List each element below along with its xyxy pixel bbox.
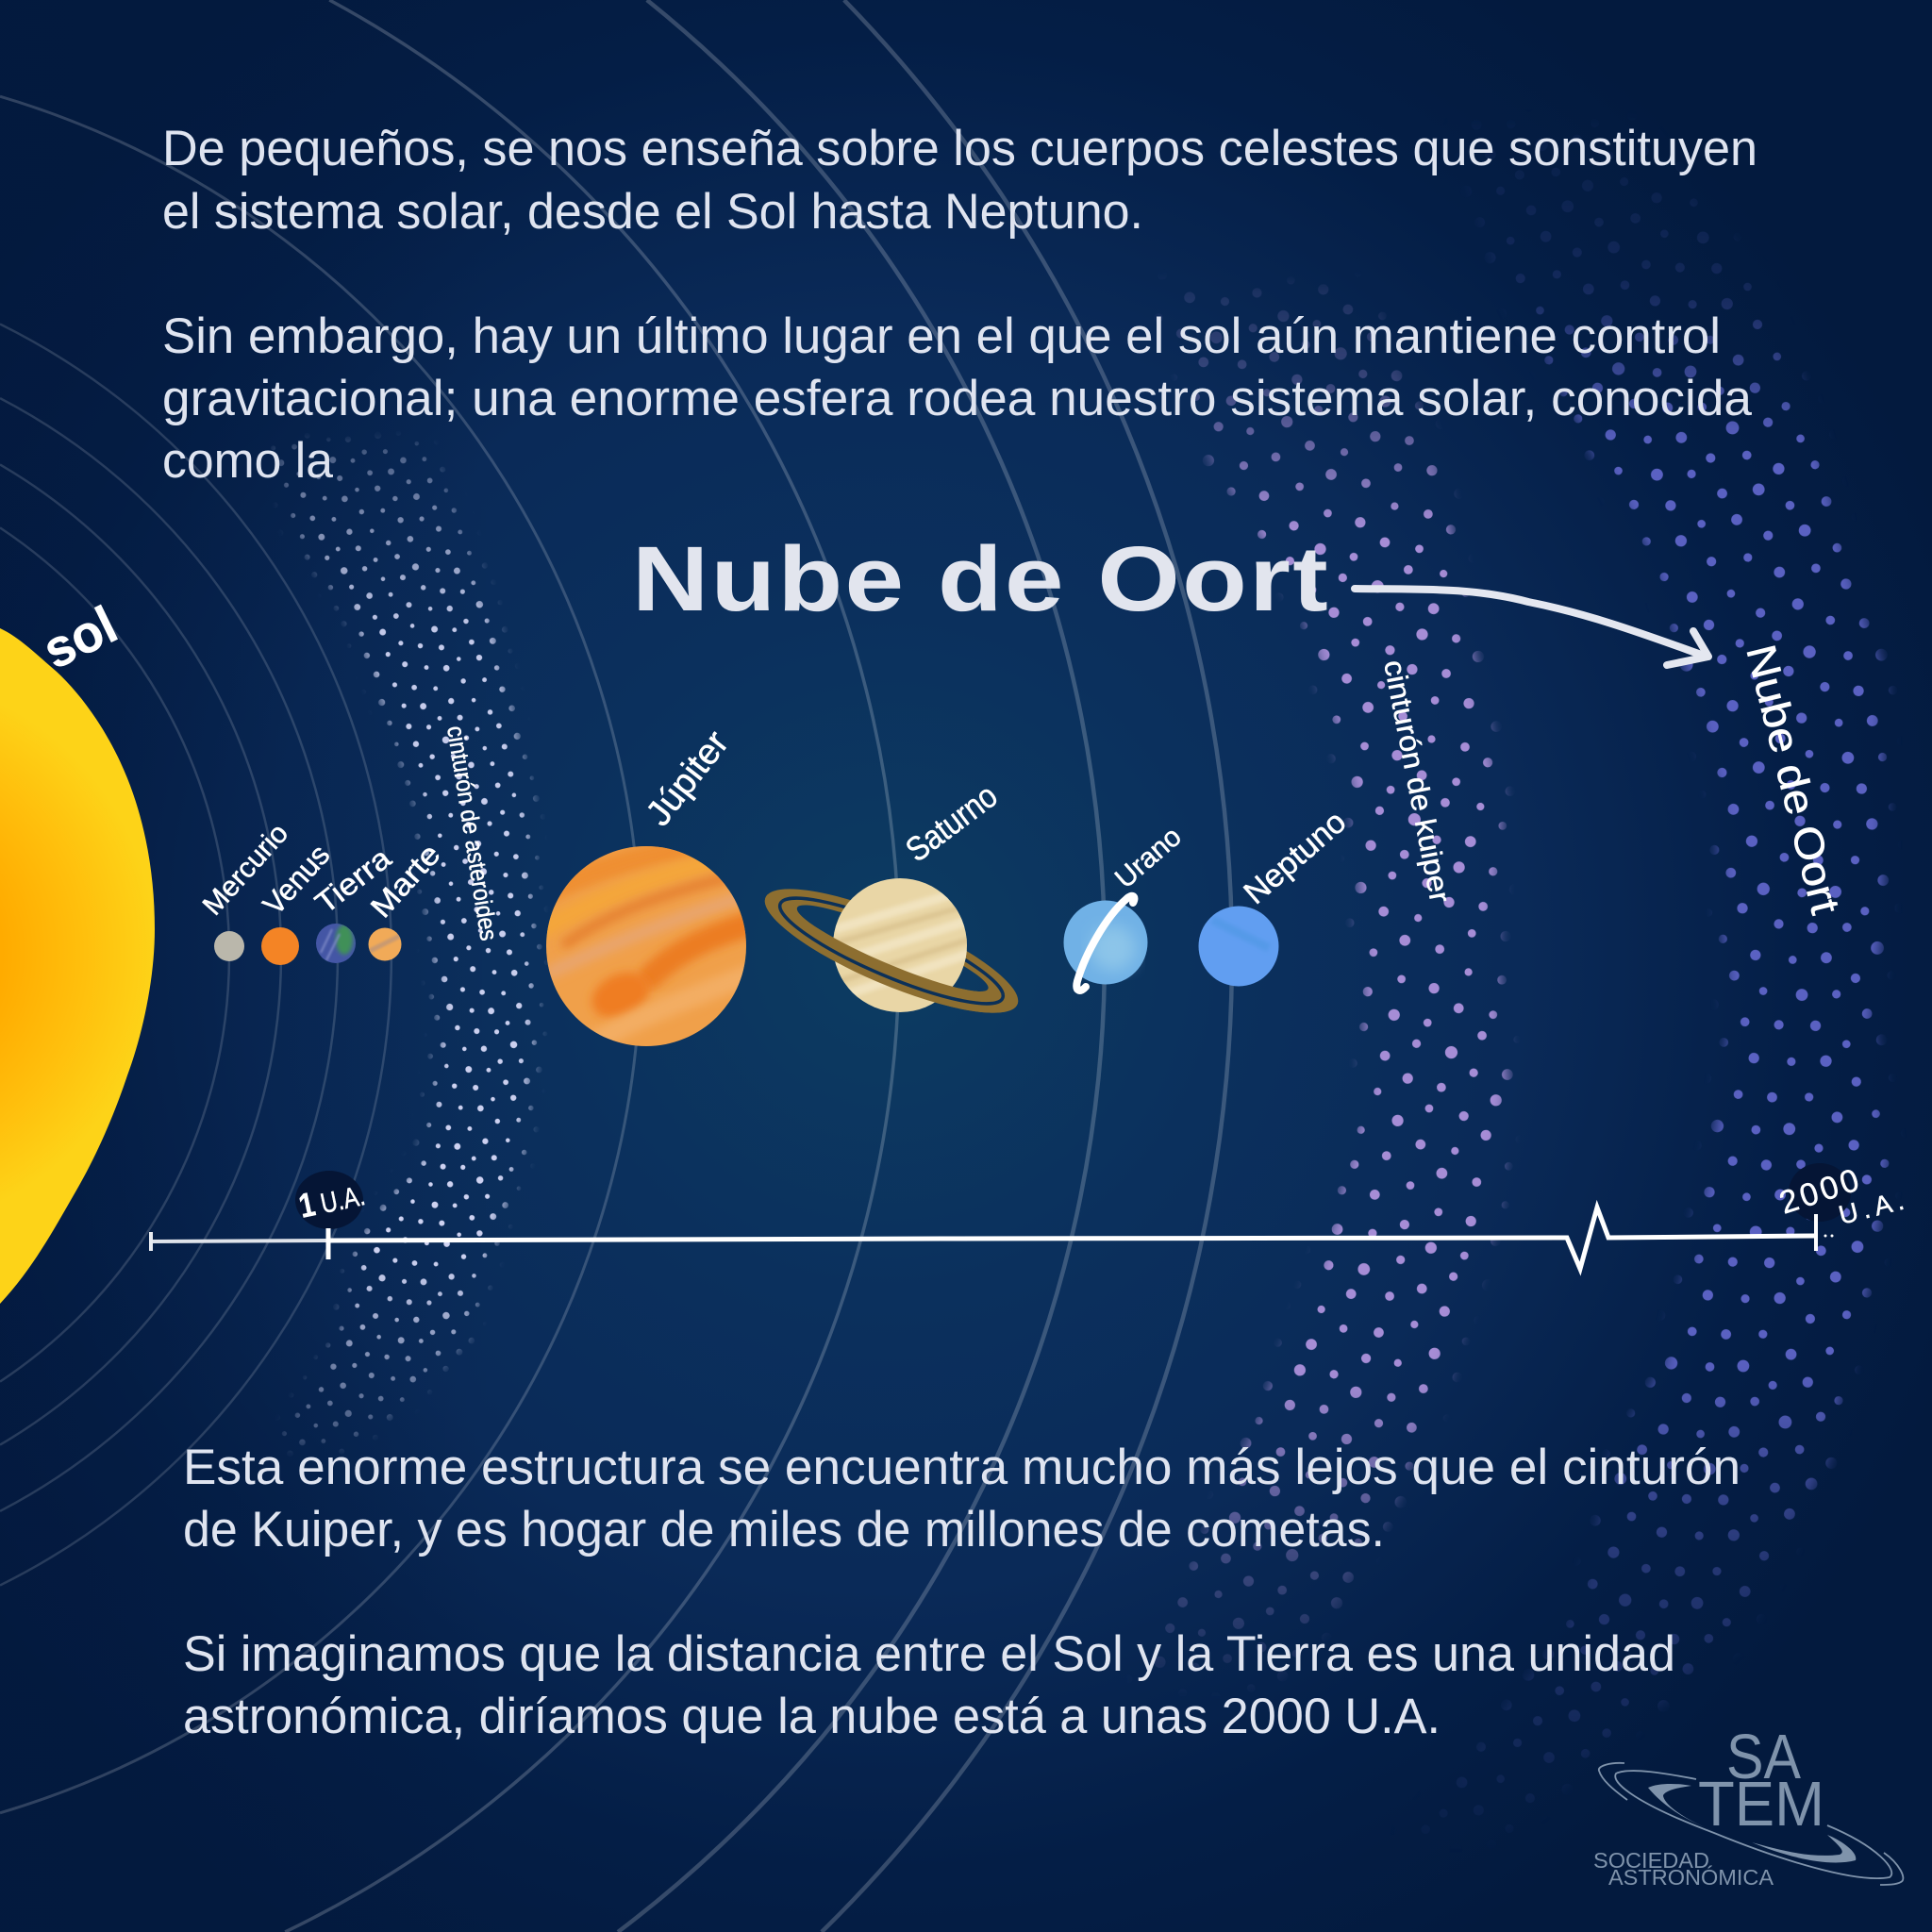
orbits [0, 0, 1232, 1932]
label: Marte: Marte [363, 837, 447, 924]
label: 2000: 2000 [1775, 1162, 1863, 1222]
label: cinturón de asteroides: cinturón de asteroides [441, 724, 504, 942]
kuiper belt dots [1155, 281, 1516, 1678]
planet: Saturno [764, 789, 1019, 1013]
planet: Júpiter [546, 731, 746, 1046]
label: U.A.: U.A. [1836, 1186, 1907, 1230]
planet: Neptuno [1198, 815, 1345, 987]
label: 1 U.A.: 1 U.A. [295, 1174, 368, 1225]
closing text: Si imaginamos que la distancia entre el Sol y la Tierra es una unidad [183, 1626, 1675, 1682]
intro text [162, 121, 1757, 489]
label: sol: sol [34, 594, 125, 680]
label: Urano: Urano [1109, 821, 1188, 894]
closing text: de Kuiper, y es hogar de miles de millones de cometas. [183, 1502, 1385, 1557]
label: Mercurio: Mercurio [197, 818, 294, 922]
label: Tierra: Tierra [308, 841, 397, 921]
label: Nube de Oort (vertical): Nube de Oort [1737, 641, 1848, 919]
arrow: title to oort cloud [1355, 589, 1708, 665]
planet: Urano [1064, 821, 1188, 991]
label: cinturón de kuiper: cinturón de kuiper [1377, 658, 1457, 906]
label: Venus: Venus [256, 838, 336, 922]
closing text [183, 1440, 1740, 1744]
logo: SATEM Sociedad Astronómica: TEM [1698, 1769, 1824, 1840]
closing text: astronómica, diríamos que la nube está a unas 2000 U.A. [183, 1689, 1441, 1744]
logo: SATEM Sociedad Astronómica: SOCIEDAD [1593, 1848, 1709, 1873]
intro text: el sistema solar, desde el Sol hasta Neptuno. [162, 184, 1143, 240]
closing text: Esta enorme estructura se encuentra mucho más lejos que el cinturón [183, 1440, 1740, 1495]
intro text: De pequeños, se nos enseña sobre los cuerpos celestes que sonstituyen [162, 121, 1757, 176]
planet: Tierra [313, 853, 393, 963]
intro text: como la [162, 433, 334, 489]
logo: SATEM Sociedad Astronómica [1593, 1722, 1903, 1890]
oort cloud dots [1440, 145, 1894, 1817]
label: Júpiter: Júpiter [639, 724, 737, 834]
intro text: Sin embargo, hay un último lugar en el que el sol aún mantiene control [162, 308, 1721, 364]
intro text: gravitacional; una enorme esfera rodea nuestro sistema solar, conocida [162, 371, 1753, 426]
label: Saturno: Saturno [898, 775, 1005, 869]
title: Nube de Oort [632, 527, 1330, 630]
asteroid belt dots [271, 436, 547, 1453]
logo: SATEM Sociedad Astronómica: SA [1726, 1722, 1801, 1792]
planet: Marte [368, 848, 440, 960]
planet: Mercurio [197, 818, 294, 961]
planet: Venus [256, 838, 336, 965]
label: Neptuno: Neptuno [1237, 804, 1353, 911]
distance scale [151, 1162, 1907, 1269]
sun [0, 628, 155, 1304]
logo: SATEM Sociedad Astronómica: ASTRONÓMICA [1608, 1865, 1774, 1890]
